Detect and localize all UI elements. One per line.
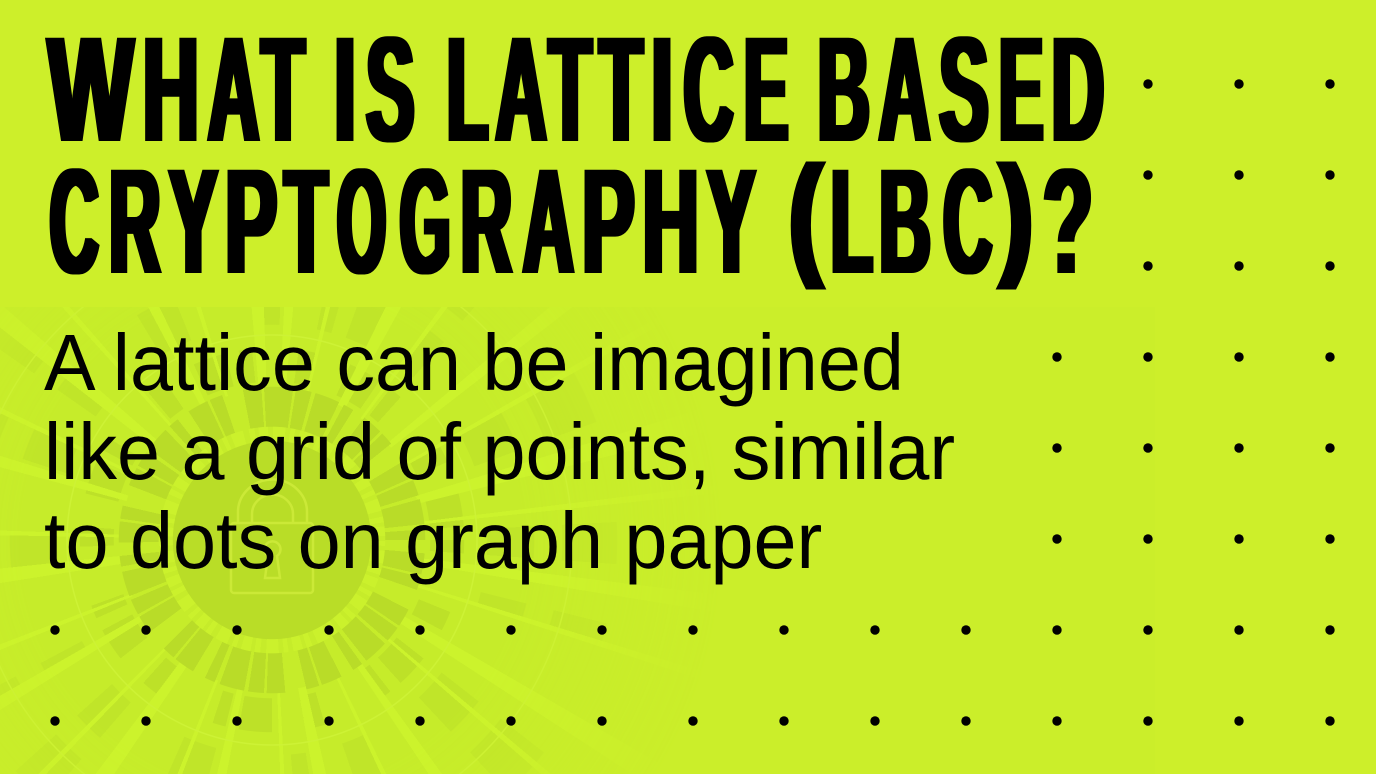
- title line 1: A: [496, 5, 547, 173]
- toothed ring around disc: [0, 307, 1155, 774]
- title line 1: T: [262, 5, 304, 173]
- title line 2: (: [788, 136, 824, 290]
- title line 2: C: [50, 138, 99, 305]
- title line 2: R: [109, 137, 160, 305]
- title line 1: T: [549, 5, 591, 173]
- title line 1: [48, 5, 1104, 174]
- icon: padlock outline: [230, 478, 314, 594]
- title line 2: G: [400, 138, 450, 305]
- title line 2: Y: [169, 137, 218, 305]
- title line 1: E: [999, 5, 1043, 173]
- title line 1: S: [939, 6, 989, 174]
- title line 1: I: [652, 6, 673, 174]
- inner disc behind lock: [0, 307, 1155, 774]
- title line 1: L: [447, 5, 488, 173]
- dark block ring: [118, 387, 425, 693]
- title line 1: A: [208, 5, 259, 173]
- title line 2: B: [879, 138, 931, 305]
- title line 2: Y: [707, 137, 755, 305]
- title line 1: T: [600, 5, 642, 173]
- title line 1: D: [1052, 5, 1104, 173]
- title line 2: ): [998, 136, 1033, 290]
- title line 2: O: [337, 139, 386, 306]
- title line 2: H: [643, 139, 699, 306]
- title line 2: T: [284, 137, 327, 305]
- title line 1: A: [879, 5, 930, 173]
- title line 2: P: [582, 139, 635, 306]
- body text: to dots on graph paper: [44, 496, 822, 585]
- body text: [44, 318, 955, 585]
- title line 2: R: [461, 137, 512, 305]
- title line 1: B: [818, 5, 870, 173]
- title line 1: C: [684, 5, 733, 173]
- title line 2: P: [225, 139, 277, 306]
- title line 2: [50, 136, 1093, 306]
- body text: like a grid of points, similar: [44, 407, 955, 496]
- title line 1: I: [334, 6, 356, 174]
- background: radial lock burst: [0, 307, 612, 774]
- body text: A lattice can be imagined: [44, 318, 904, 407]
- title line 1: S: [366, 5, 414, 173]
- title line 1: H: [143, 6, 199, 174]
- title line 1: E: [744, 5, 788, 173]
- title line 1: W: [48, 7, 133, 174]
- title line 2: L: [831, 138, 873, 305]
- title line 2: ?: [1043, 138, 1093, 305]
- title: [45, 5, 1104, 306]
- title line 2: C: [943, 138, 992, 305]
- title line 2: A: [523, 137, 574, 305]
